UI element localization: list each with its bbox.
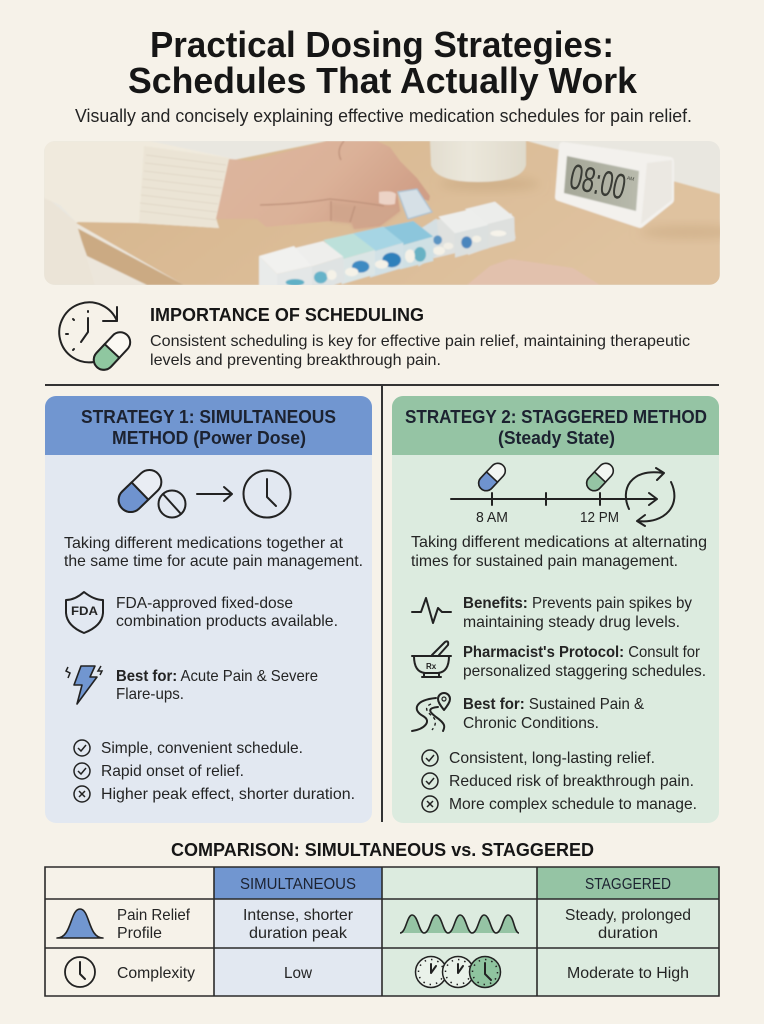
panel 1 description xyxy=(64,535,363,570)
best for note xyxy=(116,668,318,703)
panel 2 header xyxy=(392,396,719,455)
comparison table xyxy=(45,867,719,996)
table header: simultaneous: SIMULTANEOUS xyxy=(240,876,356,893)
staggered profile value: duration xyxy=(598,925,658,942)
row label: pain relief profile: Pain Relief xyxy=(117,907,191,924)
FDA note xyxy=(116,595,338,630)
pharmacist note: Pharmacist's Protocol: Consult for xyxy=(463,644,701,661)
pros and cons list: Simple, convenient schedule. xyxy=(101,740,303,757)
pros and cons list xyxy=(74,740,355,803)
row label: pain relief profile xyxy=(117,907,191,942)
section: importance of scheduling: IMPORTANCE OF SCHEDULING xyxy=(150,305,424,325)
panel 2 heading: STRATEGY 2: STAGGERED METHOD xyxy=(405,407,707,427)
comparison heading: COMPARISON: SIMULTANEOUS vs. STAGGERED xyxy=(171,840,594,860)
panel: strategy 2 staggered method xyxy=(392,396,719,823)
subtitle: Visually and concisely explaining effective medication schedules for pain relief. xyxy=(75,106,692,126)
best for note: Best for: Sustained Pain & xyxy=(463,696,644,713)
best for note: Flare-ups. xyxy=(116,686,184,703)
title: Schedules That Actually Work xyxy=(128,60,638,101)
staggered profile value: Steady, prolonged xyxy=(565,907,691,924)
section: importance of scheduling: levels and preventing breakthrough pain. xyxy=(150,352,441,369)
timeline: dose times with cycle arrows xyxy=(451,460,674,526)
photo clock time: AM xyxy=(626,175,635,183)
icon: lightning bolt xyxy=(66,666,102,704)
row label: pain relief profile: Profile xyxy=(117,925,162,942)
photo clock time xyxy=(570,164,634,199)
panel 2 description: Taking different medications at alternating xyxy=(411,534,707,551)
panel 1 header xyxy=(45,396,372,455)
best for note xyxy=(463,696,644,732)
icon: single peak curve xyxy=(57,909,103,938)
icon: mortar and pestle: Rx xyxy=(426,662,437,671)
table header: staggered: STAGGERED xyxy=(585,876,671,893)
icon: mortar and pestle xyxy=(412,641,451,677)
panel 2 description: times for sustained pain management. xyxy=(411,553,678,570)
pros and cons list: Reduced risk of breakthrough pain. xyxy=(449,773,694,790)
icon: pulse line xyxy=(412,598,451,623)
panel 1 description: Taking different medications together at xyxy=(64,535,344,552)
timeline: dose times with cycle arrows: 8 AM xyxy=(476,509,508,526)
icon: winding road with pin xyxy=(412,693,450,731)
icon: FDA shield: FDA xyxy=(71,606,98,618)
pharmacist note xyxy=(463,644,706,680)
pros and cons list: Rapid onset of relief. xyxy=(101,763,244,780)
photo clock time: 08:00 xyxy=(566,156,630,207)
panel 2 heading: (Steady State) xyxy=(498,428,615,448)
section: importance of scheduling: Consistent scheduling is key for effective pain relief, maintaining therapeutic xyxy=(150,333,690,350)
staggered complexity value: Moderate to High xyxy=(567,965,689,982)
title xyxy=(128,24,638,101)
staggered profile value xyxy=(565,907,691,942)
panel: strategy 1 simultaneous method xyxy=(45,396,372,823)
FDA note: FDA-approved fixed-dose xyxy=(116,595,293,612)
icon: three clocks xyxy=(416,956,500,988)
best for note: Best for: Acute Pain & Severe xyxy=(116,668,318,685)
pros and cons list: Higher peak effect, shorter duration. xyxy=(101,786,355,803)
panel 2 description xyxy=(411,534,707,570)
pros and cons list xyxy=(422,750,697,813)
table header: simultaneous xyxy=(214,867,382,899)
icon: capsule and tablet leading to clock xyxy=(114,465,290,518)
simultaneous profile value: duration peak xyxy=(249,925,348,942)
simultaneous profile value xyxy=(243,907,354,942)
benefits note: maintaining steady drug levels. xyxy=(463,614,680,631)
panel 2 heading xyxy=(405,407,707,448)
FDA note: combination products available. xyxy=(116,613,338,630)
pros and cons list: More complex schedule to manage. xyxy=(449,796,697,813)
best for note: Chronic Conditions. xyxy=(463,715,599,732)
table header: staggered xyxy=(537,867,719,899)
section: importance of scheduling xyxy=(150,305,690,369)
benefits note xyxy=(463,595,692,631)
simultaneous complexity value: Low xyxy=(284,965,312,982)
title: Practical Dosing Strategies: xyxy=(150,24,614,65)
panel 1 heading: STRATEGY 1: SIMULTANEOUS xyxy=(81,407,336,427)
icon: clock xyxy=(65,957,95,987)
pharmacist note: personalized staggering schedules. xyxy=(463,663,706,680)
timeline: dose times with cycle arrows: 12 PM xyxy=(580,509,619,526)
panel 1 description: the same time for acute pain management. xyxy=(64,553,363,570)
icon: FDA shield xyxy=(66,592,103,633)
pros and cons list: Consistent, long-lasting relief. xyxy=(449,750,655,767)
simultaneous profile value: Intense, shorter xyxy=(243,907,354,924)
photo: hand filling a weekly pill organizer beside a digital clock xyxy=(44,141,720,285)
icon: repeating wave curve xyxy=(400,915,519,933)
benefits note: Benefits: Prevents pain spikes by xyxy=(463,595,692,612)
panel 1 heading: METHOD (Power Dose) xyxy=(112,428,306,448)
icon: clock with capsule xyxy=(59,302,134,374)
row label: complexity: Complexity xyxy=(117,965,195,982)
panel 1 heading xyxy=(81,407,336,448)
